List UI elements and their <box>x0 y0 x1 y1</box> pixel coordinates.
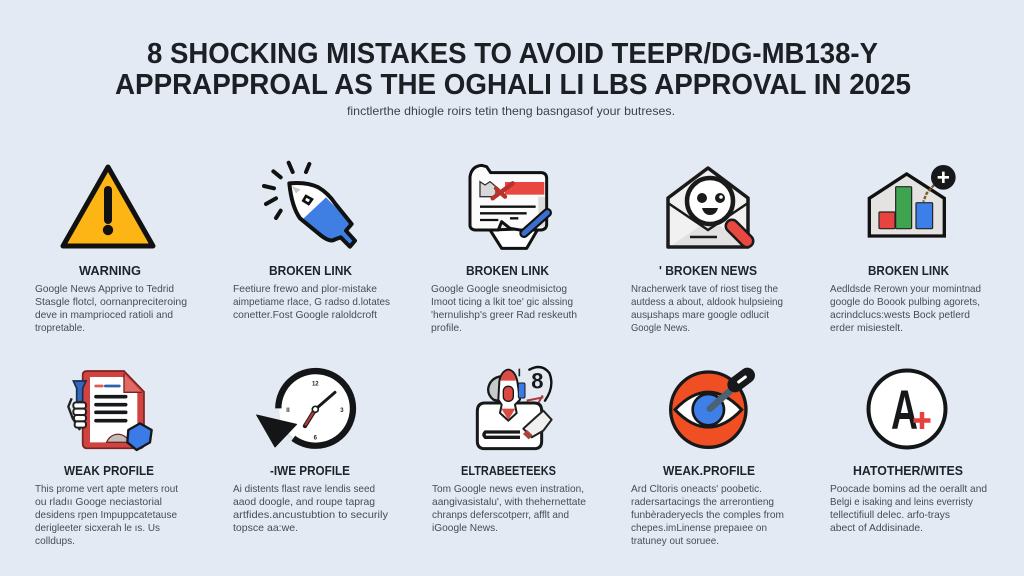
text block: radersartacings the arrerontieng <box>631 496 774 508</box>
heading: BROKEN LINK <box>466 263 550 278</box>
panel: broken link 2 <box>431 165 577 334</box>
heading: WEAK PROFILE <box>64 463 154 478</box>
icon: envelope with robot: 8 <box>531 369 543 394</box>
text block: aangivasistalu', with thehernettate <box>432 496 586 508</box>
text block: funbèraderyecls the comples from <box>631 509 784 521</box>
icon: eye target with pen <box>671 372 747 447</box>
text block: This prome vert apte meters rout <box>35 483 178 495</box>
title <box>115 38 911 101</box>
heading: BROKEN LINK <box>269 263 353 278</box>
text block: tratuney out soruee. <box>631 535 719 547</box>
text block: artfides.ancustubtion to securily <box>233 509 389 521</box>
text block: chepes.imLinense prepaıee on <box>631 522 767 534</box>
icon: broken rocket <box>264 163 355 247</box>
icon: clock with arrow: 6 <box>314 435 318 441</box>
panel: warning <box>35 167 187 334</box>
panel: broken news <box>631 168 783 334</box>
text block <box>35 483 178 547</box>
text block: erder misiestelt. <box>830 322 903 334</box>
text block: Ai distents flast rave lendis seed <box>233 483 375 495</box>
heading: ' BROKEN NEWS <box>659 263 757 278</box>
heading: HATOTHER/WITES <box>853 463 963 478</box>
text block: topsce aa:we. <box>233 522 298 534</box>
text block: 'hernulishp's greer Rad reskeuth <box>431 309 577 321</box>
title: 8 SHOCKING MISTAKES TO AVOID TEEPR/DG-MB138-Y <box>147 38 878 70</box>
icon: torn document <box>470 165 547 248</box>
icon: envelope with robot <box>477 367 552 449</box>
text block: conetter.Fost Google raloldcroft <box>233 309 377 321</box>
text block <box>431 283 577 334</box>
text block: Poocade bomins ad the oerallt and <box>830 483 987 495</box>
text block: profile. <box>431 322 462 334</box>
icon: envelope with magnifier face <box>668 168 748 247</box>
text block <box>631 483 784 547</box>
text block <box>631 283 783 334</box>
panel: hatother writes <box>830 370 987 534</box>
text block: desidens rpen Impuppcatetause <box>35 509 177 521</box>
text block: Belgi e isaking and leins everristy <box>830 496 974 508</box>
text block: derigleeter sicxerah le ıs. Us <box>35 522 160 534</box>
text block <box>432 483 586 534</box>
text block: aaod doogle, and roupe taprag <box>233 496 375 508</box>
heading: BROKEN LINK <box>868 263 950 278</box>
icon: clock with arrow <box>257 371 353 447</box>
panel: clock <box>233 371 389 534</box>
icon: A plus grade <box>868 370 946 448</box>
icon: A plus grade: A <box>891 378 918 441</box>
text block: Imoot ticing a lkit toe' gic alssing <box>431 296 573 308</box>
text block: Tom Google news even instration, <box>432 483 584 495</box>
text block: tropretable. <box>35 322 85 334</box>
icon: clock with arrow: 12 <box>312 381 319 387</box>
text block: Feetiure frewo and plor-mistake <box>233 283 377 295</box>
heading: WEAK.PROFILE <box>663 463 755 478</box>
panel: eltrabeeteeks <box>432 367 586 534</box>
text block: aimpetiame rlace, G radso d.lotates <box>233 296 390 308</box>
text block <box>35 283 187 334</box>
text block: acrindclucs:wests Bock petlerd <box>830 309 970 321</box>
heading: -IWE PROFILE <box>270 463 350 478</box>
text block: chranps deferscotperr, afflt and <box>432 509 569 521</box>
text block: Stasgle flotcl, oornanpreciteroing <box>35 296 187 308</box>
heading: ELTRABEETEEKS <box>461 463 556 478</box>
icon: document in hand <box>68 371 152 450</box>
text block: Google Google sneodmisictog <box>431 283 567 295</box>
text block: iGoogle News. <box>432 522 498 534</box>
text block: tellectifiull delec. arfo-trays <box>830 509 950 521</box>
text block: Nracherwerk tave of riost tiseg the <box>631 283 778 295</box>
icon: clock with arrow: 3 <box>340 408 344 414</box>
text block: Aedldsde Rerown your momintnad <box>830 283 981 295</box>
heading: WARNING <box>79 263 141 278</box>
panel: weak profile 1 <box>35 371 178 547</box>
text block: Google News Apprive to Tedrid <box>35 283 174 295</box>
text block: abect of Addisinade. <box>830 522 923 534</box>
icon: house with bar chart <box>869 165 956 236</box>
title: APPRAPPROAL AS THE OGHALI LI LBS APPROVAL IN 2025 <box>115 69 911 101</box>
text block: ou rladıı Googe neciastorial <box>35 496 162 508</box>
panel: broken link 1 <box>233 163 390 321</box>
subtitle: finctlerthe dhiogle roirs tetin theng basngasof your butreses. <box>347 104 675 118</box>
text block: Ard Cltoris oneacts' poobetic. <box>631 483 762 495</box>
text block: Google News. <box>631 322 690 334</box>
icon: warning triangle <box>63 167 153 246</box>
text block: autdess a about, aldook hulpsieing <box>631 296 783 308</box>
panel: broken link 3 <box>830 165 981 334</box>
text block: colldups. <box>35 535 75 547</box>
text block <box>233 283 390 321</box>
text block <box>233 483 389 534</box>
text block: ausµshaps mare google odlucit <box>631 309 769 321</box>
panel: weak profile 2 <box>631 372 784 547</box>
icon: clock with arrow: II <box>286 408 290 414</box>
text block <box>830 483 987 534</box>
text block <box>830 283 981 334</box>
text block: deve in mamprioced ratioli and <box>35 309 173 321</box>
text block: google do Boook pulbing agorets, <box>830 296 980 308</box>
